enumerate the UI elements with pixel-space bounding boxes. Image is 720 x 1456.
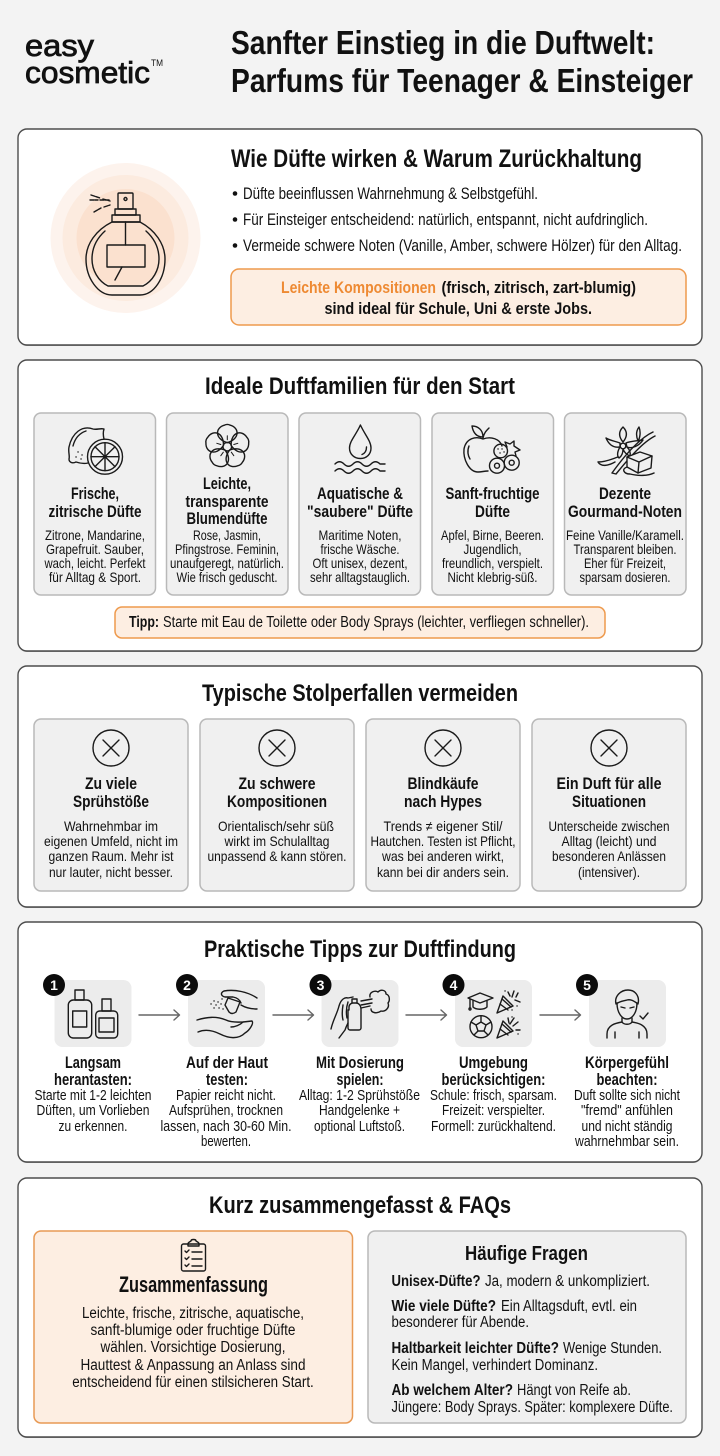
text: Aufsprühen, trocknen xyxy=(169,1103,283,1119)
callout: Tipp: Starte mit Eau de Toilette oder Body Sprays (leichter, verfliegen schneller). xyxy=(163,614,589,631)
text: Unterscheide zwischen xyxy=(548,818,670,834)
text: Hauttest & Anpassung an Anlass sind xyxy=(80,1357,306,1374)
text xyxy=(34,1088,152,1135)
icon: cross circle xyxy=(591,730,627,766)
callout: leichte Kompositionen: sind ideal für Schule, Uni & erste Jobs. xyxy=(324,299,592,318)
icon: cross circle xyxy=(93,730,129,766)
title xyxy=(186,1054,268,1089)
FAQ: Unisex xyxy=(392,1273,650,1290)
FAQ: Unisex: Ja, modern & unkompliziert. xyxy=(485,1273,650,1290)
text: Papier reicht nicht. xyxy=(176,1088,276,1104)
text: Apfel, Birne, Beeren. xyxy=(441,527,544,543)
text xyxy=(310,527,410,585)
text: lassen, nach 30-60 Min. xyxy=(160,1119,292,1135)
title: transparente xyxy=(186,492,268,511)
title: Zu schwere xyxy=(238,774,316,793)
icon: clipboard xyxy=(182,1240,206,1271)
card: frische zitrische Düfte xyxy=(34,413,156,595)
arrow xyxy=(273,1010,314,1020)
callout: leichte Kompositionen: Leichte Kompositionen xyxy=(281,278,436,297)
card: Blindkäufe xyxy=(366,719,520,891)
icon: lemon xyxy=(69,428,122,474)
title xyxy=(48,484,142,521)
text xyxy=(208,818,346,864)
text: Grapefruit. Sauber, xyxy=(46,541,144,557)
title: Sanfter Einstieg in die Duftwelt: xyxy=(231,24,655,61)
callout: leichte Kompositionen: (frisch, zitrisch, zart-blumig) xyxy=(442,278,636,297)
icon: cross circle xyxy=(259,730,295,766)
title xyxy=(307,484,413,521)
panel: wie Düfte wirken xyxy=(18,129,702,346)
icon: perfume bottle xyxy=(50,163,200,313)
number badge: 4 xyxy=(450,977,458,993)
panel: praktische Tipps xyxy=(18,922,702,1163)
text: Maritime Noten, xyxy=(318,527,402,543)
text xyxy=(441,527,544,585)
heading: Kurz zusammengefasst & FAQs xyxy=(209,1192,511,1219)
bullet list xyxy=(233,185,682,255)
logo: easy cosmetic: easy xyxy=(25,28,95,63)
icon: hand spraying xyxy=(331,990,389,1038)
text: und nicht ständig xyxy=(582,1119,672,1135)
text: Oft unisex, dezent, xyxy=(312,555,408,571)
title: Blindkäufe xyxy=(408,774,478,793)
title: testen: xyxy=(206,1071,248,1089)
title: Leichte, xyxy=(203,474,251,493)
text xyxy=(44,818,178,880)
title: nach Hypes xyxy=(404,792,482,811)
heading: Typische Stolperfallen vermeiden xyxy=(202,680,518,707)
heading: Ideale Duftfamilien für den Start xyxy=(205,373,515,400)
title xyxy=(446,484,540,521)
text: freundlich, verspielt. xyxy=(442,555,543,571)
title: Ein Duft für alle xyxy=(556,774,662,793)
text: Orientalisch/sehr süß xyxy=(218,818,334,834)
FAQ: wie viele xyxy=(392,1298,637,1331)
title xyxy=(316,1054,404,1089)
text xyxy=(72,1305,314,1391)
number badge: 3 xyxy=(317,977,325,993)
title: Sprühstöße xyxy=(73,792,149,811)
text xyxy=(44,527,146,585)
heading: Wie Düfte wirken & Warum Zurückhaltung xyxy=(231,145,642,173)
panel: Zusammenfassung und FAQs xyxy=(18,1178,702,1438)
FAQ: wie viele: Wie viele Düfte? xyxy=(392,1298,496,1315)
FAQ: Unisex: Unisex-Düfte? xyxy=(392,1273,480,1290)
title: Sanft-fruchtige xyxy=(446,484,540,503)
icon: hands with spray xyxy=(197,990,257,1038)
logo: easy cosmetic xyxy=(25,28,163,90)
FAQ: wie viele: Ein Alltagsduft, evtl. ein xyxy=(501,1298,637,1315)
card: transparente Blumendüfte xyxy=(166,413,288,595)
text: besonderen Anlässen xyxy=(552,848,666,864)
text: sehr alltagstauglich. xyxy=(310,569,410,585)
title: Aquatische & xyxy=(317,484,403,503)
text: Alltag: 1-2 Sprühstöße xyxy=(299,1088,420,1104)
title: zitrische Düfte xyxy=(48,502,142,521)
text xyxy=(574,1088,680,1150)
text: "fremd" anfühlen xyxy=(581,1103,673,1119)
panel: häufige Fragen xyxy=(368,1231,686,1423)
text xyxy=(160,1088,292,1150)
icon: apple and berries xyxy=(464,426,520,473)
step 3 xyxy=(299,974,420,1135)
panel: Zusammenfassung xyxy=(34,1231,352,1423)
text: wählen. Vorsichtige Dosierung, xyxy=(100,1339,286,1356)
icon: cross circle xyxy=(425,730,461,766)
text xyxy=(299,1088,420,1135)
text: Transparent bleiben. xyxy=(574,541,676,557)
title: beachten: xyxy=(596,1071,658,1089)
icon: person with check xyxy=(607,990,648,1038)
text: bewerten. xyxy=(201,1134,251,1150)
step 4 xyxy=(430,974,557,1135)
title xyxy=(231,24,693,99)
text: wirkt im Schulalltag xyxy=(224,833,330,849)
title xyxy=(227,774,327,811)
title xyxy=(73,774,149,811)
text: Wie frisch geduscht. xyxy=(176,569,278,585)
card: aquatische Düfte xyxy=(299,413,420,595)
text: Nicht klebrig-süß. xyxy=(448,569,538,585)
card: zu viele Sprühstöße xyxy=(34,719,188,891)
title: Langsam xyxy=(65,1054,121,1072)
FAQ: Alter xyxy=(392,1382,673,1416)
text: frische Wäsche. xyxy=(320,541,400,557)
title xyxy=(404,774,482,811)
text: Freizeit: verspielter. xyxy=(442,1103,545,1119)
text: wahrnehmbar sein. xyxy=(574,1134,679,1150)
text: entscheidend für einen stilsicheren Start. xyxy=(72,1374,314,1391)
text: Leichte, frische, zitrische, aquatische, xyxy=(82,1305,304,1322)
title: Frische, xyxy=(71,484,119,503)
text: Alltag (leicht) und xyxy=(562,833,656,849)
arrow xyxy=(139,1010,180,1020)
icon: vanilla and sugar cube xyxy=(598,427,655,475)
title xyxy=(568,484,682,521)
text: Starte mit 1-2 leichten xyxy=(34,1088,152,1104)
title: Mit Dosierung xyxy=(316,1054,404,1072)
text: für Alltag & Sport. xyxy=(49,569,141,585)
title: Düfte xyxy=(475,502,510,521)
card: zu schwere Kompositionen xyxy=(200,719,354,891)
title: spielen: xyxy=(336,1071,384,1089)
icon: two bottles xyxy=(68,990,118,1038)
text: Schule: frisch, sparsam. xyxy=(430,1088,557,1104)
text xyxy=(430,1088,557,1135)
icon: cap, poppers and ball xyxy=(468,991,520,1038)
title: Umgebung xyxy=(459,1054,528,1072)
title: Blumendüfte xyxy=(186,509,268,528)
icon: water drop xyxy=(335,425,385,473)
text: ganzen Raum. Mehr ist xyxy=(48,848,174,864)
text: (intensiver). xyxy=(578,864,640,880)
text: Trends ≠ eigener Stil/ xyxy=(384,818,503,834)
text xyxy=(170,527,284,585)
text: Pfingstrose. Feminin, xyxy=(175,541,279,557)
text: wach, leicht. Perfekt xyxy=(44,555,146,571)
text: unpassend & kann stören. xyxy=(208,848,346,864)
text: Zitrone, Mandarine, xyxy=(45,527,145,543)
panel: Stolperfallen xyxy=(18,666,702,908)
text: Duft sollte sich nicht xyxy=(574,1088,680,1104)
text: nur lauter, nicht besser. xyxy=(49,864,173,880)
title xyxy=(442,1054,546,1089)
title: Kompositionen xyxy=(227,792,327,811)
callout: leichte Kompositionen xyxy=(231,269,686,325)
icon: flower xyxy=(203,424,251,470)
title xyxy=(54,1054,132,1089)
text xyxy=(548,818,670,880)
title: Dezente xyxy=(599,484,651,503)
panel: ideale Duftfamilien xyxy=(18,360,702,652)
text: eigenen Umfeld, nicht im xyxy=(44,833,178,849)
title xyxy=(556,774,662,811)
card: dezente Gourmand-Noten xyxy=(564,413,686,595)
text: unaufgeregt, natürlich. xyxy=(170,555,284,571)
FAQ: Haltbarkeit: Haltbarkeit leichter Düfte? xyxy=(392,1340,559,1357)
text: sparsam dosieren. xyxy=(580,569,670,585)
title: "saubere" Düfte xyxy=(307,502,413,521)
logo: easy cosmetic: cosmetic xyxy=(25,55,150,90)
text: Hautchen. Testen ist Pflicht, xyxy=(370,833,516,849)
text: kann bei dir anders sein. xyxy=(377,864,509,880)
number badge xyxy=(176,974,198,996)
title xyxy=(186,474,268,528)
arrow xyxy=(540,1010,580,1020)
text: Wahrnehmbar im xyxy=(64,818,158,834)
text: zu erkennen. xyxy=(58,1119,128,1135)
step 1 xyxy=(34,974,152,1135)
text: Jugendlich, xyxy=(464,541,522,557)
number badge: 1 xyxy=(50,977,58,993)
text: Rose, Jasmin, xyxy=(193,527,261,543)
card: sanft-fruchtige Düfte xyxy=(432,413,554,595)
bullet list: Düfte beeinflussen Wahrnehmung & Selbstgefühl. xyxy=(243,185,538,203)
number badge: 5 xyxy=(583,977,591,993)
number badge xyxy=(442,974,464,996)
text: Feine Vanille/Karamell. xyxy=(566,527,684,543)
text: Handgelenke + xyxy=(319,1103,400,1119)
title: Situationen xyxy=(572,792,646,811)
text: optional Luftstoß. xyxy=(314,1119,405,1135)
title: berücksichtigen: xyxy=(442,1071,546,1089)
FAQ: Alter: Hängt von Reife ab. xyxy=(517,1382,631,1399)
title xyxy=(585,1054,669,1089)
logo: easy cosmetic: TM xyxy=(151,58,163,68)
FAQ: wie viele: besonderer für Abende. xyxy=(392,1314,529,1331)
FAQ: Alter: Ab welchem Alter? xyxy=(392,1382,513,1399)
title: herantasten: xyxy=(54,1071,132,1089)
step 5 xyxy=(574,974,680,1150)
title: Gourmand-Noten xyxy=(568,502,682,521)
number badge: 2 xyxy=(183,977,191,993)
text: Eher für Freizeit, xyxy=(584,555,666,571)
title: Zusammenfassung xyxy=(119,1272,268,1297)
text: was bei anderen wirkt, xyxy=(381,848,504,864)
title: Körpergefühl xyxy=(585,1054,669,1072)
number badge xyxy=(43,974,65,996)
callout: Tipp xyxy=(115,607,605,638)
card: ein Duft für alle Situationen xyxy=(532,719,686,891)
text: Formell: zurückhaltend. xyxy=(431,1119,556,1135)
text xyxy=(370,818,516,880)
arrow xyxy=(406,1010,446,1020)
FAQ: Haltbarkeit: Wenige Stunden. xyxy=(563,1340,662,1357)
number badge xyxy=(310,974,332,996)
text xyxy=(566,527,684,585)
callout: Tipp: Tipp: xyxy=(129,614,159,631)
title: Häufige Fragen xyxy=(465,1243,588,1265)
text: sanft-blumige oder fruchtige Düfte xyxy=(90,1322,296,1339)
text: Düften, um Vorlieben xyxy=(36,1103,150,1119)
FAQ: Haltbarkeit: Kein Mangel, verhindert Dominanz. xyxy=(392,1357,598,1374)
FAQ: Haltbarkeit xyxy=(392,1340,662,1374)
step 2 xyxy=(160,974,292,1150)
heading: Praktische Tipps zur Duftfindung xyxy=(204,936,516,963)
title: Auf der Haut xyxy=(186,1054,268,1072)
number badge xyxy=(576,974,598,996)
title: Zu viele xyxy=(85,774,137,793)
